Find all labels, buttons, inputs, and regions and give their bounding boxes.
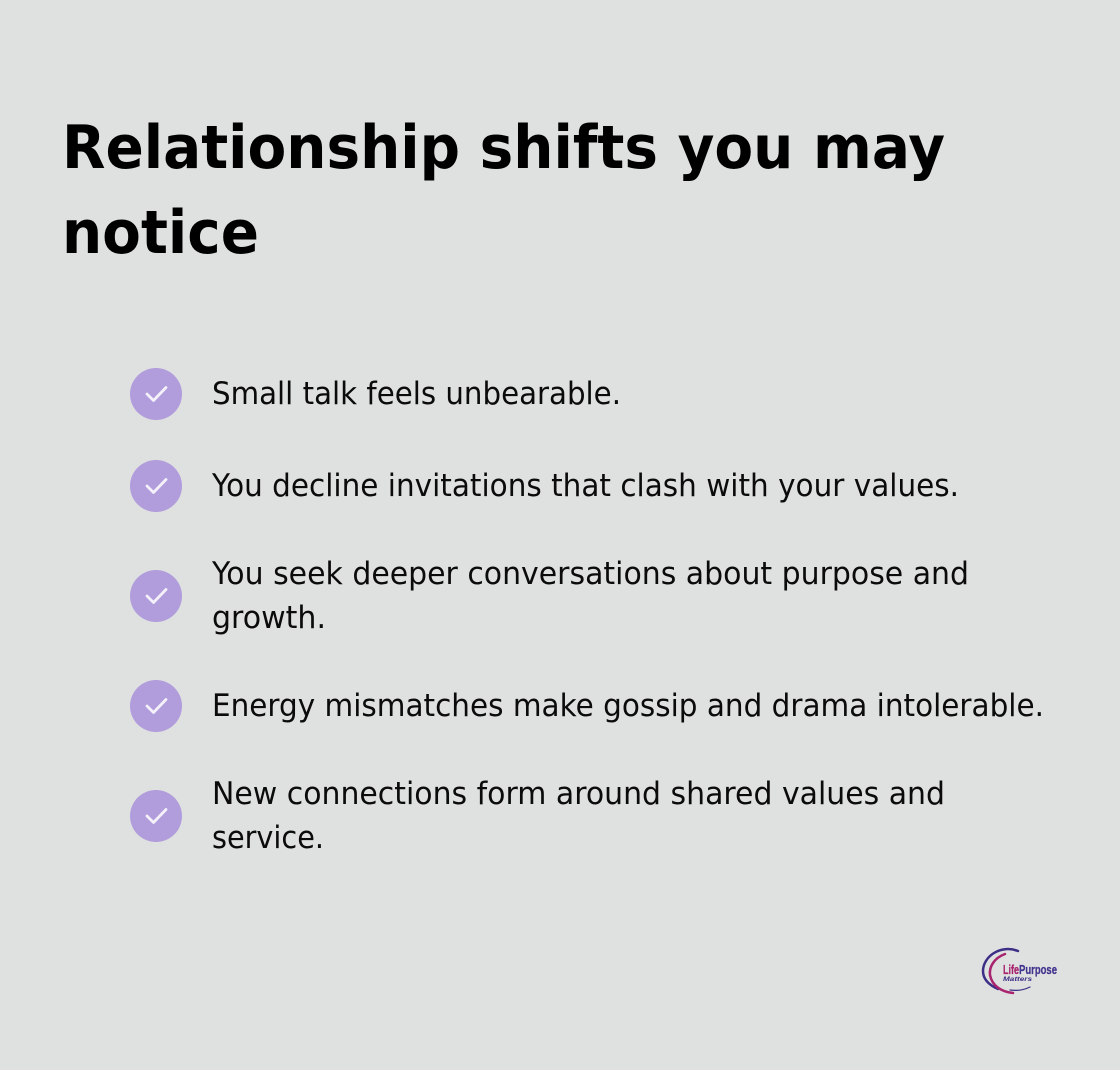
item 5	[130, 776, 945, 856]
logo: Life Purpose Matters: Matters	[1003, 976, 1032, 983]
item 1: Small talk feels unbearable.	[212, 376, 621, 412]
item 4: Energy mismatches make gossip and drama intolerable.	[212, 688, 1044, 724]
item 3	[130, 556, 969, 636]
logo: Life Purpose Matters: Purpose	[1019, 962, 1057, 977]
title	[62, 113, 945, 268]
item 2: You decline invitations that clash with your values.	[211, 468, 959, 504]
logo: Life Purpose Matters: Life	[1003, 962, 1019, 977]
checklist	[130, 368, 1044, 856]
item 4	[130, 680, 1044, 732]
item 3: growth.	[212, 600, 326, 636]
title: Relationship shifts you may	[62, 113, 945, 183]
logo: Life Purpose Matters	[983, 949, 1057, 993]
title: notice	[62, 198, 259, 268]
item 2	[130, 460, 959, 512]
item 1	[130, 368, 621, 420]
item 3: You seek deeper conversations about purpose and	[211, 556, 969, 592]
item 5: service.	[212, 820, 324, 856]
item 5: New connections form around shared values and	[212, 776, 945, 812]
